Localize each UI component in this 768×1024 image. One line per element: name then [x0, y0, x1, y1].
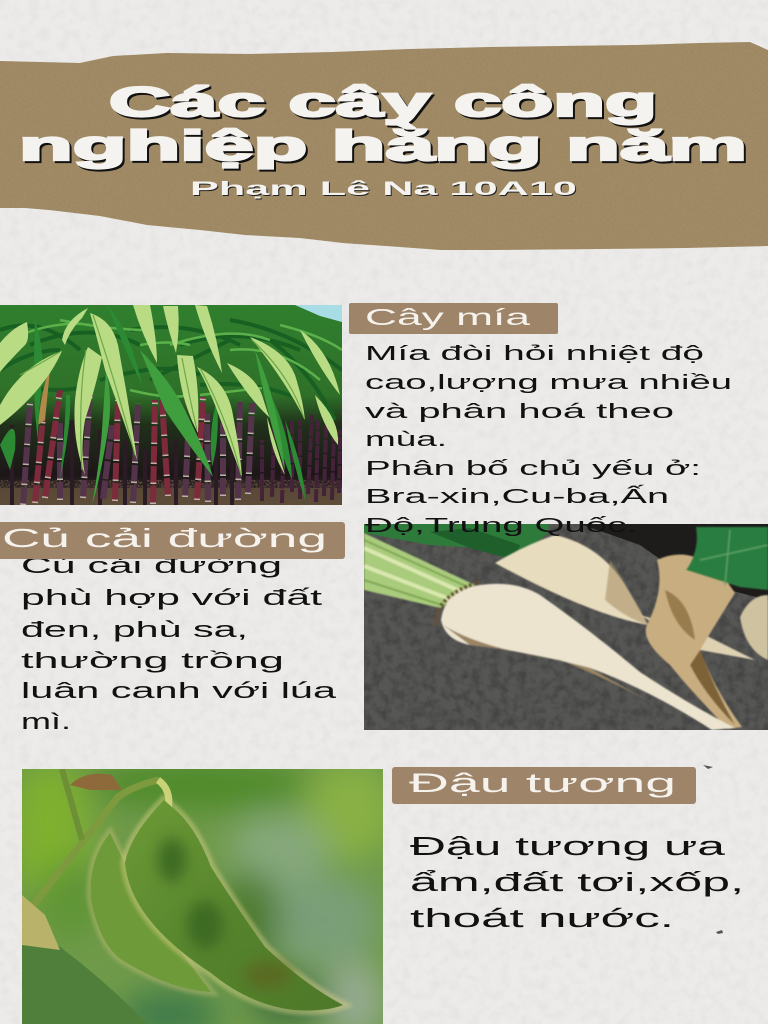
title	[19, 78, 749, 171]
text: Cây mía description	[365, 342, 732, 537]
text: Củ cải đường description: luân canh với lúa	[21, 678, 337, 703]
text: Củ cải đường description	[21, 553, 337, 734]
author subtitle	[190, 178, 578, 201]
text: Cây mía description: Độ,Trung Quốc.	[365, 514, 637, 537]
author subtitle: Phạm Lê Na 10A10	[191, 179, 578, 201]
author subtitle: Phạm Lê Na 10A10	[190, 178, 577, 200]
label: Đậu tương	[392, 767, 696, 804]
text: Đậu tương description	[410, 833, 744, 933]
label: Đậu tương: Đậu tương	[409, 768, 676, 798]
text: Củ cải đường description: mì.	[21, 709, 71, 734]
photo: soybean pods	[10, 760, 395, 1024]
text: Củ cải đường description: Củ cải đường	[21, 553, 282, 578]
title: nghiệp hằng năm	[19, 121, 747, 169]
text: Cây mía description: cao,lượng mưa nhiều	[365, 371, 732, 394]
label: Củ cải đường	[0, 522, 345, 559]
text: Đậu tương description: ẩm,đất tơi,xốp,	[410, 869, 744, 897]
text: Cây mía description: Mía đòi hỏi nhiệt độ	[365, 342, 704, 365]
torn kraft paper banner	[0, 40, 768, 252]
photo: sugar beet	[364, 524, 768, 730]
text: Củ cải đường description: đen, phù sa,	[21, 617, 248, 642]
label: Củ cải đường: Củ cải đường	[2, 523, 327, 553]
title: nghiệp hằng năm	[21, 123, 749, 171]
text: Cây mía description: Phân bố chủ yếu ở:	[365, 457, 701, 480]
title: Các cây công	[111, 80, 659, 127]
text: Cây mía description: mùa.	[365, 428, 447, 451]
title: Các cây công	[109, 78, 657, 125]
text: Củ cải đường description: phù hợp với đất	[21, 585, 323, 610]
label: Cây mía	[349, 303, 558, 334]
photo: sugarcane	[0, 305, 342, 505]
text: Đậu tương description: thoát nước.	[410, 905, 674, 933]
back cane cluster	[262, 415, 340, 503]
label: Cây mía: Cây mía	[365, 304, 530, 330]
text: Củ cải đường description: thường trồng	[21, 648, 284, 673]
text: Cây mía description: và phân hoá theo	[365, 400, 674, 423]
text: Đậu tương description: Đậu tương ưa	[410, 833, 727, 861]
text: Cây mía description: Bra-xin,Cu-ba,Ấn	[365, 485, 669, 508]
